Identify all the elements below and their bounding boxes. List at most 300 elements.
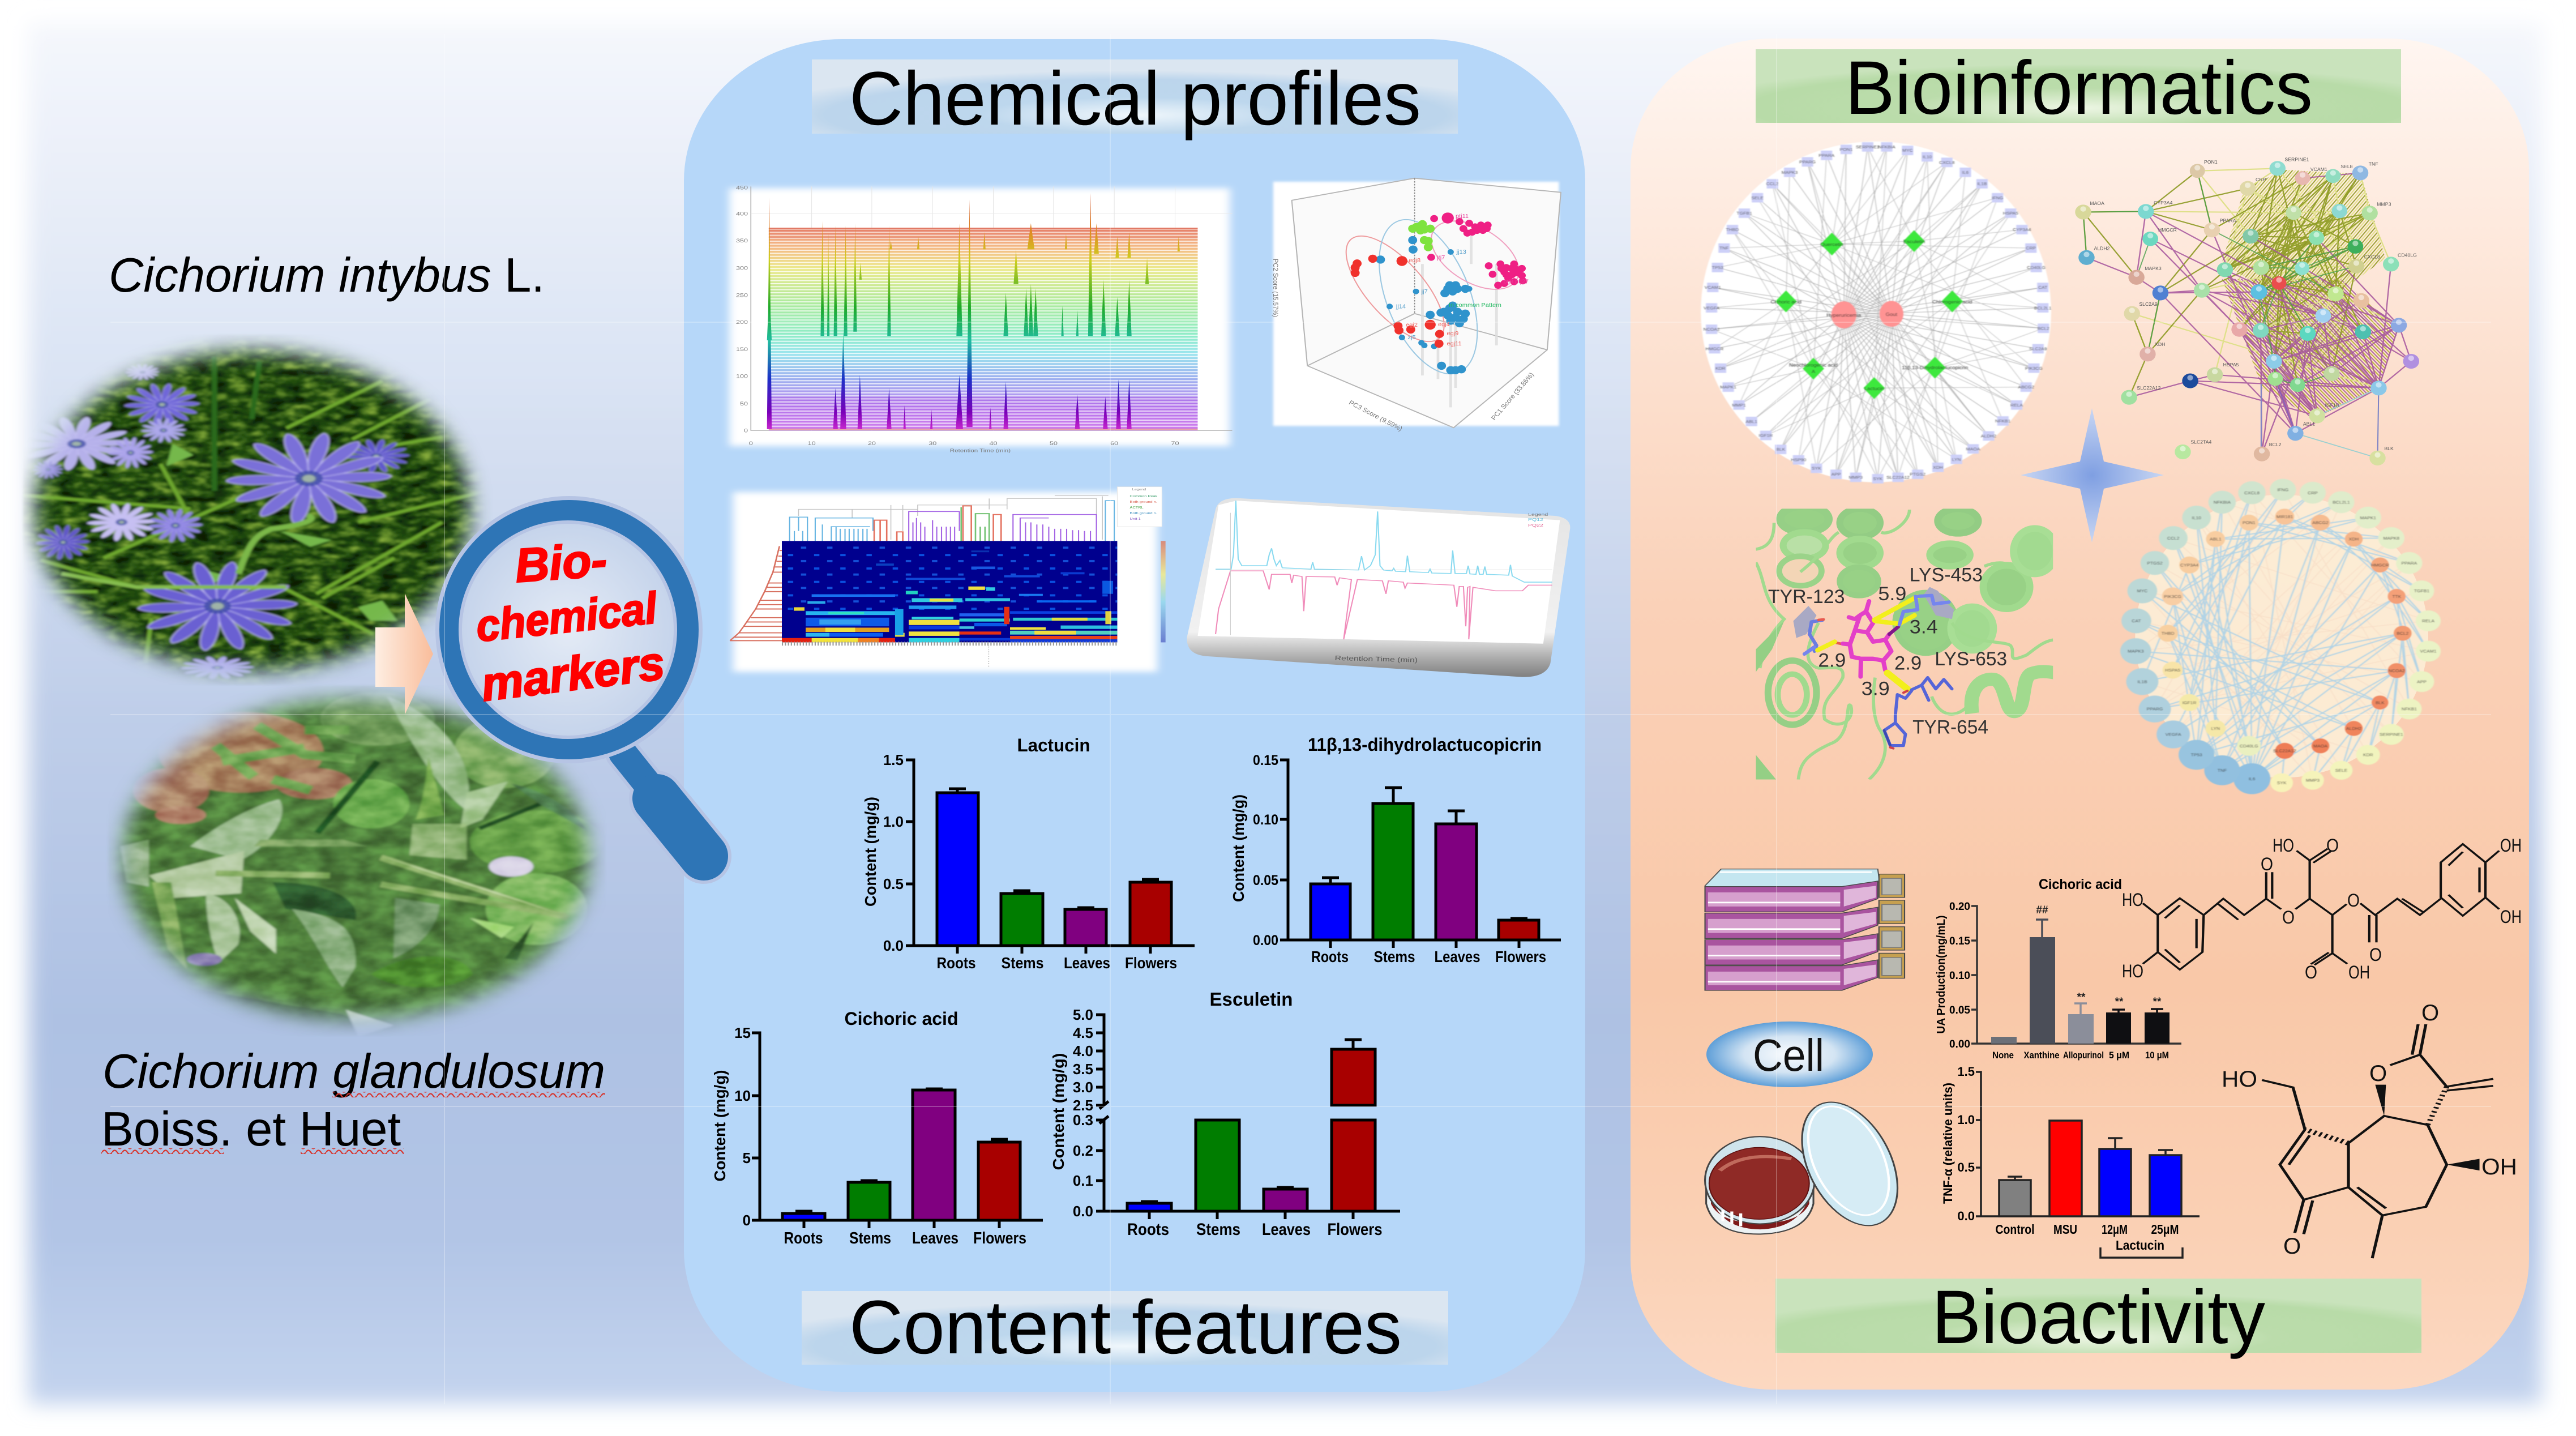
chart: STRING protein interaction network (2075, 157, 2419, 465)
figure: lactucin structure: O (2283, 1234, 2301, 1259)
chart: compound-target-disease network: SLC22A12 (1886, 475, 1910, 480)
chart: mirror chromatogram on raised card: Legend (1528, 512, 1548, 517)
chart: compound-target-disease network: 11β,13-Dihydrolactucopicrin (1902, 365, 1968, 370)
chart: compound-target-disease network: SYK (1812, 466, 1822, 471)
chart: compound-target-disease network: CAT (2038, 285, 2048, 290)
chart: 3D PCA scatter: egj2 (1406, 322, 1418, 328)
chart: compound-target-disease network: BLK (1776, 447, 1786, 452)
figure: lactucin structure: O (2369, 1061, 2387, 1086)
figure: cichoric acid structure: O (2282, 907, 2295, 928)
heading: Bioactivity: Bioactivity (1932, 1275, 2265, 1360)
chart: Esculetin bars with broken axis: 0.0 (1073, 1203, 1093, 1220)
figure: cichoric acid structure: HO (2122, 961, 2143, 981)
icon: magnifying glass with biochemical markers (435, 496, 704, 856)
chart: degree-sorted circular network: TTK (2392, 594, 2402, 599)
chart: Lactucin bars: Lactucin (1017, 735, 1090, 755)
figure: molecular docking view: 3.4 (1910, 615, 1938, 638)
chart: stacked rainbow chromatograms: Retention Time (min) (950, 448, 1011, 454)
chart: 3D PCA scatter: PC3 Score (9.59%) (1347, 399, 1404, 433)
chart: compound-target-disease network: Lactucin (1864, 386, 1884, 391)
chart: degree-sorted circular network: HSPA5 (2165, 668, 2180, 673)
chart: mirror chromatogram on raised card: PQ22 (1528, 523, 1543, 528)
chart: degree-sorted circular network: ABL1 (2210, 537, 2222, 541)
chart: Lactucin bars: Flowers (1125, 954, 1177, 972)
chart: 3D PCA scatter: egj8 (1409, 258, 1420, 264)
chart: degree-sorted circular network: XDH (2349, 537, 2359, 541)
chart: 11β,13-dihydrolactucopicrin bars: Content (mg/g) (1230, 794, 1247, 902)
chart: 11β,13-dihydrolactucopicrin bars: Stems (1373, 948, 1415, 965)
icon: petri dish (1705, 1096, 1915, 1234)
figure: molecular docking view: LYS-653 (1935, 647, 2007, 670)
arrow: from plants to magnifier (375, 593, 433, 715)
chart: compound-target-disease network: SELE (1751, 195, 1764, 200)
chart: compound-target-disease network: CCL2 (1766, 182, 1778, 186)
chart: STRING protein interaction network: SERPINE1 (2284, 157, 2309, 163)
chart: compound-target-disease network: ABL1 (1745, 420, 1757, 424)
chart: degree-sorted circular network: KDR (2363, 753, 2373, 757)
chart: STRING protein interaction network: SELE (2340, 164, 2354, 169)
chart: compound-target-disease network: HSPA5 (2003, 211, 2018, 216)
chart: compound-target-disease network: MYC (1902, 148, 1913, 153)
chart: 11β,13-dihydrolactucopicrin bars: 0.00 (1253, 933, 1278, 948)
chart: stacked rainbow chromatograms: 50 (1050, 441, 1058, 447)
chart: 3D PCA scatter: ptj8 ptj27 (1503, 279, 1529, 285)
figure: lactucin structure: HO (2222, 1067, 2257, 1092)
chart: 3D PCA scatter: PC2 Score (15.57%) (1272, 259, 1280, 317)
chart: stacked rainbow chromatograms: 50 (740, 401, 748, 407)
chart: compound-target-disease network: VEGFA (1704, 306, 1720, 310)
chart: compound-target-disease network: NFKB1 (1995, 419, 2010, 424)
chart: stacked rainbow chromatograms: 100 (736, 374, 748, 379)
chart: compound-target-disease network: CD40LG (2027, 266, 2046, 270)
chart: Cichoric acid UA production bars: 0.05 (1949, 1005, 1970, 1016)
chart: 11β,13-dihydrolactucopicrin bars: Flowers (1495, 948, 1546, 965)
icon: magnifying glass with biochemical markers: Bio- (514, 533, 609, 592)
chart: Cichoric acid bars: 10 (734, 1087, 751, 1104)
chart: 3D PCA scatter: egj11 (1447, 340, 1462, 347)
chart: compound-target-disease network: KDR (1715, 366, 1726, 371)
chart: stacked rainbow chromatograms: 0 (749, 441, 753, 447)
chart: STRING protein interaction network: XDH (2155, 341, 2165, 347)
chart: 11β,13-dihydrolactucopicrin bars: Leaves (1435, 948, 1480, 965)
label: Cichorium glandulosum Boiss. et Huet: Cichorium glandulosum (102, 1045, 605, 1099)
chart: STRING protein interaction network: BCL2 (2269, 442, 2282, 447)
chart: clustered heatmap with dendrogram: Unit 1 (1130, 518, 1141, 521)
chart: STRING protein interaction network: SLC22A12 (2137, 386, 2161, 391)
chart: degree-sorted circular network: NCOA2 (2389, 669, 2405, 673)
chart: Cichoric acid UA production bars (1935, 877, 2181, 1061)
chart: compound-target-disease network: MMP1 (1732, 403, 1746, 408)
chart: STRING protein interaction network: MAOA (2090, 200, 2104, 206)
chart: TNF-α bars: 0.0 (1957, 1209, 1975, 1223)
chart: degree-sorted circular network: RELA (2422, 619, 2435, 623)
chart: 11β,13-dihydrolactucopicrin bars: 11β,13-dihydrolactucopicrin (1308, 734, 1542, 755)
chart: 11β,13-dihydrolactucopicrin bars: 0.15 (1253, 753, 1278, 768)
chart: stacked rainbow chromatograms: 350 (736, 238, 748, 244)
chart: TNF-α bars: 12μM (2102, 1222, 2128, 1237)
chart: compound-target-disease network: Cichoric acid (1771, 300, 1802, 305)
chart: stacked rainbow chromatograms: 20 (868, 441, 876, 447)
chart: degree-sorted circular network: MAPK8 (2384, 536, 2399, 541)
chart: Cichoric acid bars (711, 1008, 1043, 1247)
chart: compound-target-disease network: Quercetin (1820, 242, 1843, 247)
chart: 3D PCA scatter: ptj11 (1456, 213, 1469, 220)
chart: STRING protein interaction network: CYP3A4 (2154, 200, 2173, 206)
chart: compound-target-disease network: CXCL8 (1939, 160, 1954, 165)
chart: Cichoric acid UA production bars: 10 μM (2145, 1050, 2169, 1061)
chart: stacked rainbow chromatograms: 250 (736, 293, 748, 298)
chart: STRING protein interaction network: PPARA (2220, 218, 2236, 224)
chart: Esculetin bars with broken axis: Content (mg/g) (1050, 1053, 1067, 1170)
photo: Cichorium intybus flowers (21, 334, 493, 685)
figure: cichoric acid structure: O (2261, 854, 2273, 874)
chart: Cichoric acid UA production bars: 0.15 (1949, 935, 1970, 947)
chart: 3D PCA scatter: egj4 (1438, 322, 1450, 328)
chart: compound-target-disease network: ABCG2 (2018, 385, 2034, 390)
chart: degree-sorted circular network: HMGCR (2371, 563, 2389, 567)
chart: Cichoric acid UA production bars: 5 μM (2109, 1050, 2129, 1061)
chart: Cichoric acid UA production bars: ** (2115, 996, 2124, 1008)
chart: Cichoric acid bars: Roots (784, 1229, 823, 1247)
chart: degree-sorted circular network: SERPINE1 (2380, 732, 2403, 737)
chart: degree-sorted circular network: PPARG (2147, 707, 2163, 712)
chart: Cichoric acid bars: Flowers (973, 1229, 1026, 1247)
chart: STRING protein interaction network: CD40LG (2398, 253, 2417, 258)
chart: compound-target-disease network: NFKBIA (1878, 145, 1896, 149)
chart: compound-target-disease network: IL10 (1923, 155, 1932, 159)
chart: clustered heatmap with dendrogram: ACTRL (1130, 506, 1144, 510)
chart: compound-target-disease network: HMGCR (1705, 347, 1724, 351)
chart: degree-sorted circular network: SLC22A12 (2273, 749, 2296, 753)
heading: Chemical profiles: Chemical profiles (849, 57, 1421, 141)
chart: 3D PCA scatter: In common Pattern (1449, 302, 1501, 309)
chart: Esculetin bars with broken axis: 0.3 (1073, 1112, 1093, 1129)
chart: degree-sorted circular network: ABCG2 (2312, 520, 2329, 525)
chart: degree-sorted circular network: IFNG (2277, 488, 2288, 492)
chart: degree-sorted circular network: IL1B (2137, 679, 2147, 684)
chart: Lactucin bars: Roots (936, 954, 976, 972)
figure: cichoric acid structure: O (2305, 962, 2317, 982)
figure: cichoric acid structure: OH (2500, 835, 2522, 856)
chart: degree-sorted circular network: ALDH2 (2346, 726, 2361, 731)
figure: cichoric acid structure: O (2326, 835, 2339, 856)
chart: compound-target-disease network: MAPK1 (1720, 385, 1736, 390)
figure: cichoric acid structure: HO (2273, 835, 2294, 856)
chart: compound-target-disease network: Gout (1886, 312, 1898, 317)
chart: degree-sorted circular network: BCL2L1 (2333, 500, 2350, 505)
chart: Cichoric acid UA production bars: ** (2077, 991, 2086, 1003)
figure: molecular docking view: 5.9 (1878, 582, 1906, 605)
figure: molecular docking view (1756, 506, 2056, 780)
chart: Esculetin bars with broken axis: 0.2 (1073, 1142, 1093, 1159)
chart: TNF-α bars: MSU (2053, 1222, 2077, 1237)
chart: degree-sorted circular network: VCAM1 (2420, 649, 2437, 653)
chart: degree-sorted circular network: CRP (2308, 490, 2318, 495)
chart: degree-sorted circular network: VEGFA (2166, 732, 2182, 737)
chart: degree-sorted circular network: SELE (2335, 768, 2347, 773)
figure: molecular docking view: 2.9 (1818, 648, 1846, 671)
chart: degree-sorted circular network: PIK3CG (2164, 594, 2181, 599)
chart: degree-sorted circular network: SYK (2277, 781, 2287, 785)
chart: STRING protein interaction network: HSPA5 (2223, 362, 2239, 367)
chart: Lactucin bars: 0.5 (883, 875, 904, 892)
chart: Lactucin bars: Leaves (1064, 954, 1110, 972)
chart: STRING protein interaction network: PON1 (2204, 159, 2218, 165)
chart: degree-sorted circular network: CXCL8 (2244, 490, 2260, 495)
chart: Esculetin bars with broken axis: 4.5 (1073, 1024, 1093, 1041)
chart: Esculetin bars with broken axis: Flowers (1327, 1220, 1383, 1239)
chart: Esculetin bars with broken axis: Roots (1127, 1220, 1169, 1239)
chart: stacked rainbow chromatograms: 60 (1110, 441, 1118, 447)
chart: degree-sorted circular network: PON1 (2243, 520, 2256, 525)
label: Cichorium glandulosum Boiss. et Huet: Boiss. et Huet (101, 1102, 401, 1156)
chart: Esculetin bars with broken axis: 2.5 (1073, 1097, 1093, 1114)
chart: Lactucin bars (862, 735, 1195, 972)
chart: compound-target-disease network: BCL2 (2038, 326, 2049, 331)
chart: STRING protein interaction network: ABL1 (2303, 421, 2315, 426)
chart: degree-sorted circular network: TNF (2218, 768, 2227, 773)
chart: Cichoric acid bars: Stems (849, 1229, 891, 1247)
chart: compound-target-disease network: ALDH2 (1981, 434, 1996, 438)
chart: degree-sorted circular network: MAPK1 (2360, 515, 2376, 520)
chart: STRING protein interaction network: SLC2A9 (2139, 301, 2158, 307)
chart: TNF-α bars: 1.0 (1957, 1113, 1975, 1127)
chart: compound-target-disease network: TNF (1719, 246, 1729, 251)
chart: stacked rainbow chromatograms: 0 (744, 428, 748, 434)
chart: Esculetin bars with broken axis: Leaves (1262, 1220, 1311, 1239)
figure: lactucin structure (2222, 1001, 2517, 1259)
chart: Cichoric acid bars: 15 (734, 1024, 751, 1041)
chart: degree-sorted circular network: MIR181 (2277, 515, 2293, 519)
chart: compound-target-disease network: TP53 (1712, 266, 1723, 270)
chart: degree-sorted circular network: MAOA (2313, 743, 2328, 749)
chart: degree-sorted circular network: CAT (2132, 619, 2141, 623)
icon: stacked culture flasks (1705, 869, 1905, 990)
chart: STRING protein interaction network: ALDH2 (2094, 246, 2110, 251)
chart: 11β,13-dihydrolactucopicrin bars: Roots (1311, 948, 1349, 965)
chart: degree-sorted circular network: PPARA (2401, 561, 2417, 566)
chart: compound-target-disease network: APP (1832, 472, 1841, 477)
figure: molecular docking view: TYR-654 (1912, 715, 1988, 738)
chart: compound-target-disease network: IGF1R (1758, 433, 1773, 438)
chart: 3D PCA scatter: egj9 (1447, 330, 1458, 337)
chart: mirror chromatogram on raised card: PQ12 (1528, 517, 1543, 522)
chart: compound-target-disease network: CRP (2026, 246, 2036, 251)
chart: stacked rainbow chromatograms: 400 (736, 211, 748, 217)
chart: clustered heatmap with dendrogram (730, 487, 1166, 672)
chart: Esculetin bars with broken axis: 5.0 (1073, 1006, 1093, 1023)
chart: degree-sorted circular network: THBD (2162, 631, 2175, 636)
chart: clustered heatmap with dendrogram: Both ground n. (1130, 501, 1157, 504)
chart: Cichoric acid bars: 5 (743, 1149, 751, 1166)
chart: STRING protein interaction network: BLK (2384, 446, 2394, 451)
chart: Lactucin bars: 0.0 (883, 937, 904, 954)
chart: TNF-α bars: 1.5 (1957, 1065, 1975, 1079)
chart: degree-sorted circular network: BLK (2376, 700, 2385, 705)
chart: degree-sorted circular network: CYP3A4 (2180, 563, 2199, 567)
chart: Cichoric acid bars: Leaves (912, 1229, 958, 1247)
chart: TNF-α bars: Lactucin (2116, 1238, 2164, 1253)
chart: compound-target-disease network: PPARG (1799, 160, 1816, 164)
chart: degree-sorted circular network: TP53 (2191, 753, 2202, 757)
chart: Lactucin bars: Stems (1001, 954, 1044, 972)
chart: STRING protein interaction network: TNF (2369, 161, 2378, 167)
chart: compound-target-disease network: SERPINE1 (1856, 145, 1880, 149)
chart: STRING protein interaction network: SLC2TA4 (2190, 439, 2212, 445)
label: Cichorium intybus L.: Cichorium intybus L. (109, 249, 545, 302)
chart: compound-target-disease network: PON1 (1839, 147, 1852, 152)
chart: compound-target-disease network: RELA (2010, 403, 2023, 408)
chart: 3D PCA scatter: zj5 (1408, 335, 1416, 341)
chart: compound-target-disease network: MAPK3 (1782, 170, 1798, 175)
icon: magnifying glass with biochemical markers: markers (478, 636, 667, 711)
chart: mirror chromatogram on raised card: Retention Time (min) (1334, 655, 1418, 664)
chart: Esculetin bars with broken axis (1050, 989, 1400, 1239)
figure: molecular docking view: 2.9 (1894, 652, 1922, 674)
chart: Cichoric acid UA production bars: UA Production(mg/mL) (1935, 915, 1948, 1034)
chart: compound-target-disease network: HSP90 (1791, 458, 1806, 463)
chart: STRING protein interaction network: VCAM1 (2310, 166, 2327, 172)
chart: degree-sorted circular network: MMP3 (2306, 778, 2320, 783)
chart: Esculetin bars with broken axis: 4.0 (1073, 1042, 1093, 1059)
chart: degree-sorted circular network: NFKBIA (2214, 500, 2231, 505)
chart: Cichoric acid bars: 0 (743, 1212, 751, 1229)
chart: TNF-α bars: TNF-α (relative units) (1941, 1083, 1955, 1204)
chart: compound-target-disease network: Chlorogenic acid (1932, 300, 1972, 305)
chart: degree-sorted circular network: PTGS2 (2147, 561, 2163, 566)
figure: molecular docking view: LYS-453 (1910, 563, 1983, 585)
chart: stacked rainbow chromatograms: 450 (736, 185, 748, 191)
chart: 3D PCA scatter: jj7 (1421, 288, 1428, 295)
chart: compound-target-disease network: PIK3CG (2025, 366, 2043, 371)
chart: Cichoric acid UA production bars: ## (2036, 904, 2048, 916)
chart: degree-sorted circular network: TGFB1 (2414, 589, 2429, 593)
chart: Lactucin bars: 1.5 (883, 751, 904, 768)
chart: stacked rainbow chromatograms: 150 (736, 347, 748, 353)
chart: Cichoric acid UA production bars: Cichoric acid (2039, 877, 2122, 892)
chart: degree-sorted circular network: APP (2417, 679, 2427, 684)
chart: compound-target-disease network: MMP3 (1849, 475, 1863, 480)
chart: compound-target-disease network: IFNG (1992, 195, 2003, 200)
chart: STRING protein interaction network: CRP (2256, 177, 2266, 182)
chart: 11β,13-dihydrolactucopicrin bars: 0.10 (1253, 812, 1278, 828)
chart: compound-target-disease network: LYN (1952, 457, 1961, 462)
figure: molecular docking view: TYR-123 (1768, 585, 1845, 608)
figure: cichoric acid structure (2122, 835, 2522, 982)
chart: compound-target-disease network: A (1812, 369, 1815, 374)
chart: degree-sorted circular network: NFKB1 (2402, 707, 2417, 712)
chart: compound-target-disease network: TGFB1 (1736, 211, 1752, 216)
chart: Cichoric acid UA production bars: 0.00 (1949, 1038, 1970, 1050)
chart: Esculetin bars with broken axis: 3.5 (1073, 1061, 1093, 1078)
chart: Cichoric acid bars: Cichoric acid (845, 1008, 958, 1029)
chart: degree-sorted circular network: IL6 (2249, 777, 2255, 781)
chart: stacked rainbow chromatograms: 30 (928, 441, 936, 447)
chart: degree-sorted circular network: IGF1R (2183, 700, 2197, 705)
chart: degree-sorted circular network: MYC (2137, 589, 2148, 593)
chart: STRING protein interaction network: IGF1R (2325, 403, 2339, 408)
chart: compound-target-disease network: NCOA2 (1704, 327, 1720, 332)
chart: degree-sorted circular network: IL10 (2192, 515, 2201, 520)
chart: stacked rainbow chromatograms (729, 185, 1233, 454)
chart: STRING protein interaction network: HMGCR (2158, 227, 2177, 233)
chart: 3D PCA scatter (1272, 178, 1561, 433)
chart: clustered heatmap with dendrogram: Common Peak (1130, 495, 1158, 498)
chart: stacked rainbow chromatograms: 200 (736, 319, 748, 325)
chart: Cichoric acid bars: Content (mg/g) (711, 1070, 729, 1181)
chart: STRING protein interaction network: CXCL8 (2364, 254, 2380, 259)
chart: 3D PCA scatter: PC1 Score (33.86%) (1490, 371, 1535, 422)
chart: stacked rainbow chromatograms: 10 (808, 441, 816, 447)
figure: molecular docking view: 3.9 (1862, 677, 1890, 699)
chart: TNF-α bars (1941, 1065, 2200, 1258)
chart: STRING protein interaction network: MMP3 (2377, 202, 2391, 207)
chart: compound-target-disease network: Neochlorogenic acid (1789, 362, 1838, 367)
chart: 3D PCA scatter: jj14 (1396, 304, 1406, 310)
chart: TNF-α bars: Control (1995, 1222, 2035, 1237)
chart: degree-sorted circular network: CD40LG (2240, 743, 2258, 749)
chart: compound-target-disease network: IL1B (1977, 182, 1987, 186)
chart: stacked rainbow chromatograms: 40 (990, 441, 998, 447)
chart: 3D PCA scatter: jj13 (1456, 249, 1466, 255)
chart: mirror chromatogram on raised card (1187, 498, 1570, 677)
chart: compound-target-disease network: VCAM1 (1705, 285, 1721, 290)
chart: compound-target-disease network: IL6 (1962, 170, 1969, 175)
figure: cichoric acid structure: OH (2500, 907, 2522, 927)
chart: degree-sorted circular network: BCL2 (2397, 631, 2408, 636)
icon: magnifying glass with biochemical markers: chemical (474, 583, 660, 651)
chart: compound-target-disease network: SLC2A9 (2029, 347, 2047, 351)
chart: Cichoric acid UA production bars: Xanthine (2023, 1050, 2060, 1061)
chart: 11β,13-dihydrolactucopicrin bars (1230, 734, 1561, 965)
heading: Bioinformatics: Bioinformatics (1845, 46, 2313, 130)
figure: lactucin structure: OH (2481, 1155, 2517, 1179)
chart: compound-target-disease network: PTGS2 (1910, 472, 1925, 477)
panel: chemical profiles and content features (684, 39, 1585, 1392)
chart: Esculetin bars with broken axis: Stems (1196, 1220, 1240, 1239)
chart: compound-target-disease network: MAOA (1966, 447, 1980, 451)
chart: Esculetin bars with broken axis: 0.1 (1073, 1172, 1093, 1189)
chart: Cichoric acid UA production bars: 0.10 (1949, 970, 1970, 982)
chart: STRING protein interaction network: MAPK3 (2145, 266, 2162, 271)
chart: degree-sorted circular network: CCL2 (2167, 536, 2179, 541)
figure: cichoric acid structure: O (2369, 944, 2382, 965)
figure: cichoric acid structure: HO (2122, 890, 2143, 910)
chart: 3D PCA scatter: jtj7 (1436, 255, 1445, 261)
panel: bioinformatics and bioactivity (1631, 39, 2529, 1390)
chart: Esculetin bars with broken axis: 3.0 (1073, 1079, 1093, 1096)
chart: compound-target-disease network: Hyperuricemia (1826, 313, 1861, 318)
chart: TNF-α bars: 0.5 (1957, 1160, 1975, 1174)
chart: compound-target-disease network (1701, 142, 2051, 482)
chart: degree-sorted circular network: LYN (2211, 726, 2220, 731)
chart: stacked rainbow chromatograms: 70 (1171, 441, 1179, 447)
chart: 11β,13-dihydrolactucopicrin bars: 0.05 (1253, 873, 1278, 888)
chart: Cichoric acid UA production bars: None (1992, 1050, 2014, 1061)
chart: degree-sorted circular network: MAPK3 (2128, 649, 2144, 653)
chart: compound-target-disease network: SYK (1873, 477, 1883, 481)
icon: Cell ellipse (1706, 1022, 1873, 1087)
photo: Cichorium glandulosum leaves (108, 685, 606, 1036)
chart: Esculetin bars with broken axis: Esculetin (1209, 989, 1293, 1010)
chart: stacked rainbow chromatograms: 300 (736, 266, 748, 271)
label: Cichorium glandulosum Boiss. et Huet (101, 1045, 605, 1156)
heading: Content features: Content features (849, 1285, 1402, 1370)
chart: clustered heatmap with dendrogram: Both ground n. (1130, 512, 1157, 515)
chart: Cichoric acid UA production bars: ** (2153, 996, 2162, 1008)
figure: lactucin structure: O (2421, 1001, 2439, 1025)
icon: Cell ellipse: Cell (1753, 1030, 1824, 1080)
